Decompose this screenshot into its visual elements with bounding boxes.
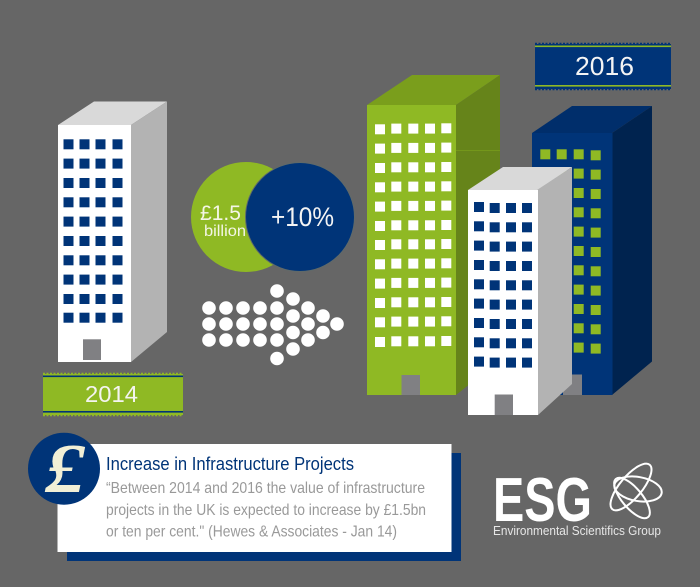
circle: +10%: +10% [271,202,334,232]
logo: ESG Environmental Scientifics Group: ESG [493,466,592,535]
circle: £1.5 billion [191,162,301,272]
icon: pound sign badge [28,431,100,508]
circle: +10% [246,162,354,272]
icon: orbit swirl [604,458,664,524]
quote text: or ten per cent." (Hewes & Associates - Jan 14) [106,524,397,540]
arrow made of dots [202,284,344,365]
ribbon: 2016: 2016 [575,51,634,81]
circle: £1.5 billion: £1.5 [200,202,241,225]
logo: ESG Environmental Scientifics Group [493,458,664,538]
icon: pound sign badge: £ [44,431,86,508]
building: 2016 white tower [468,167,572,415]
heading: increase in infrastructure projects: Increase in Infrastructure Projects [106,453,354,474]
logo: ESG Environmental Scientifics Group: Environmental Scientifics Group [493,523,661,538]
ribbon: 2016 [535,44,671,90]
quote text: “Between 2014 and 2016 the value of infrastructure [106,480,425,497]
building: 2014 white tower [58,102,167,362]
ribbon: 2014 [43,374,183,416]
ribbon: 2014: 2014 [85,381,138,407]
callout card [58,444,461,561]
building: 2016 green tower [367,75,500,395]
quote text [106,480,426,540]
building: 2016 navy tower [532,106,652,395]
circle: £1.5 billion: billion [204,223,246,240]
quote text: projects in the UK is expected to increase by £1.5bn [106,502,426,519]
